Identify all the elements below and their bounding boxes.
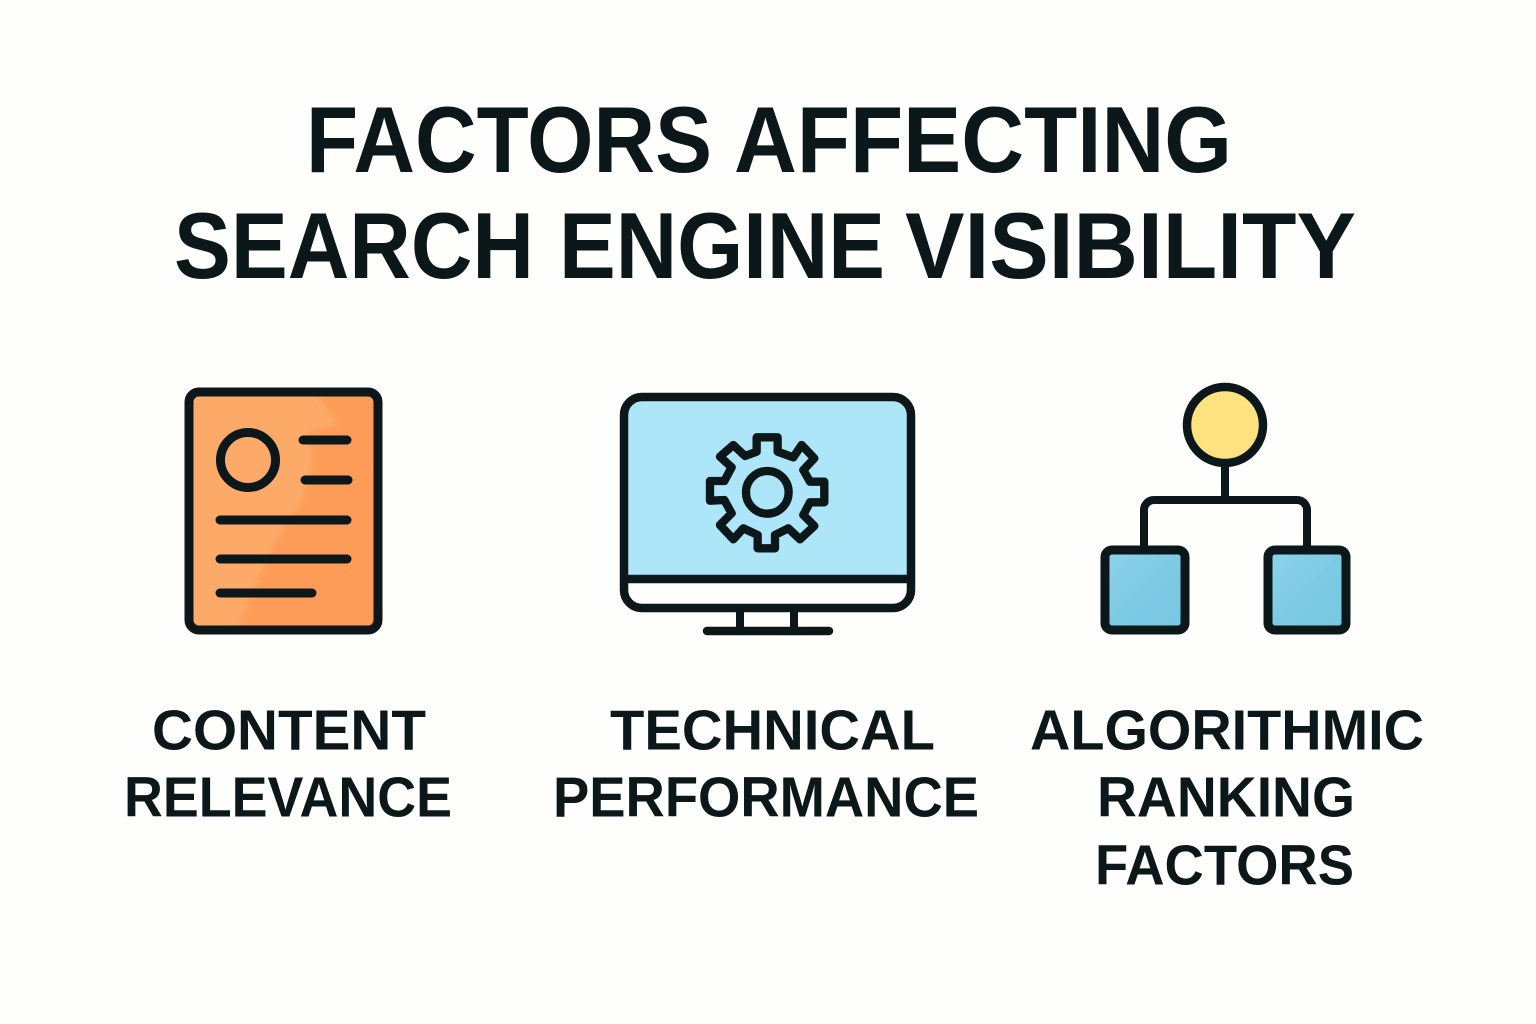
title: ENGINE (559, 193, 885, 298)
label: algorithmic ranking factors: FACTORS (1095, 834, 1354, 898)
label: technical performance: TECHNICAL (610, 698, 935, 762)
title: VISIBILITY (905, 193, 1356, 298)
label: content relevance (124, 698, 452, 830)
label: content relevance: RELEVANCE (124, 766, 452, 830)
icon: gear (710, 437, 824, 548)
title: SEARCH (174, 193, 534, 298)
label: technical performance: PERFORMANCE (553, 766, 979, 830)
label: algorithmic ranking factors: ALGORITHMIC (1030, 698, 1424, 762)
icon: monitor with gear (624, 397, 911, 631)
title: AFFECTING (734, 87, 1232, 192)
label: content relevance: CONTENT (152, 698, 426, 762)
label: technical performance (553, 698, 979, 830)
label: algorithmic ranking factors (1030, 698, 1424, 898)
icon: ranking hierarchy (1105, 387, 1346, 630)
title (174, 87, 1356, 298)
label: algorithmic ranking factors: RANKING (1097, 766, 1355, 830)
icon: content document (180, 385, 378, 640)
title: FACTORS (306, 87, 712, 192)
